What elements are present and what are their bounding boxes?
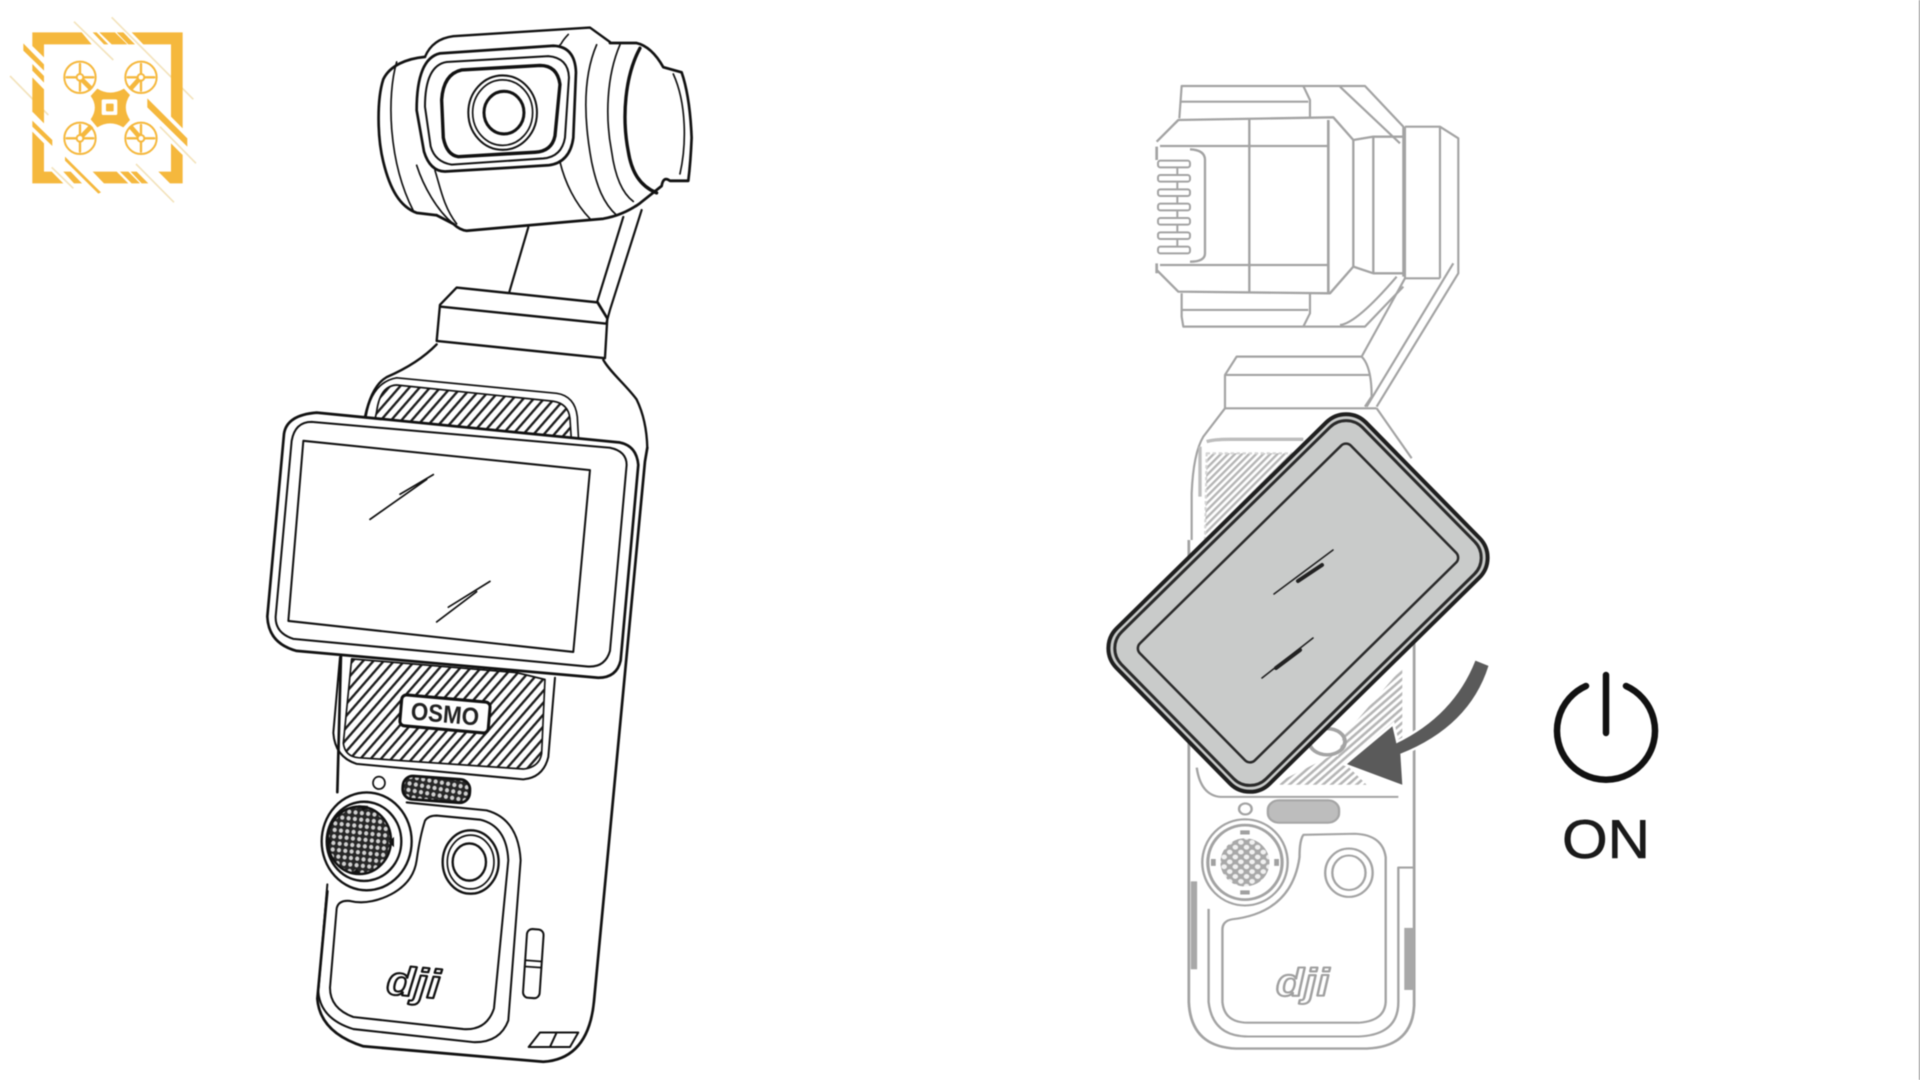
upper grille — [366, 378, 579, 444]
body outline — [317, 448, 647, 1062]
joystick — [322, 792, 412, 890]
background page edge line — [1919, 0, 1920, 1080]
ghosted lower body — [1189, 540, 1414, 1049]
ghosted dji logo: dji — [1276, 961, 1331, 1004]
illustration: camera with screen being rotated (right) — [1097, 86, 1655, 1049]
arrow: rotation direction — [1347, 661, 1488, 785]
icon: power symbol — [1557, 675, 1655, 780]
gimbal arm — [509, 210, 642, 322]
illustration: camera with front screen (left) — [267, 28, 692, 1062]
icon: gold drone logo — [10, 17, 196, 202]
control panel — [318, 802, 521, 1042]
side buttons — [523, 929, 544, 999]
lower half of body — [318, 657, 578, 1047]
flip screen — [267, 413, 638, 678]
speaker pill — [402, 775, 471, 803]
ghosted side buttons — [1191, 881, 1414, 990]
shutter button — [443, 830, 499, 894]
camera head — [379, 28, 692, 231]
ghosted panel — [1209, 834, 1414, 1037]
dji logo: dji — [385, 958, 443, 1008]
screen glare marks — [1262, 550, 1333, 678]
ghosted speaker pill — [1268, 800, 1339, 823]
indicator light — [373, 777, 385, 789]
OSMO badge: OSMO — [410, 698, 480, 732]
ghosted shutter button — [1325, 849, 1373, 897]
label: ON: ON — [1562, 808, 1650, 870]
lower grille — [333, 657, 555, 779]
port — [529, 1033, 578, 1047]
rotating flip screen — [1097, 403, 1499, 803]
shoulder — [365, 344, 647, 448]
collar — [437, 288, 607, 358]
ghosted joystick — [1202, 819, 1288, 905]
ghosted upper gimbal — [1157, 86, 1458, 540]
